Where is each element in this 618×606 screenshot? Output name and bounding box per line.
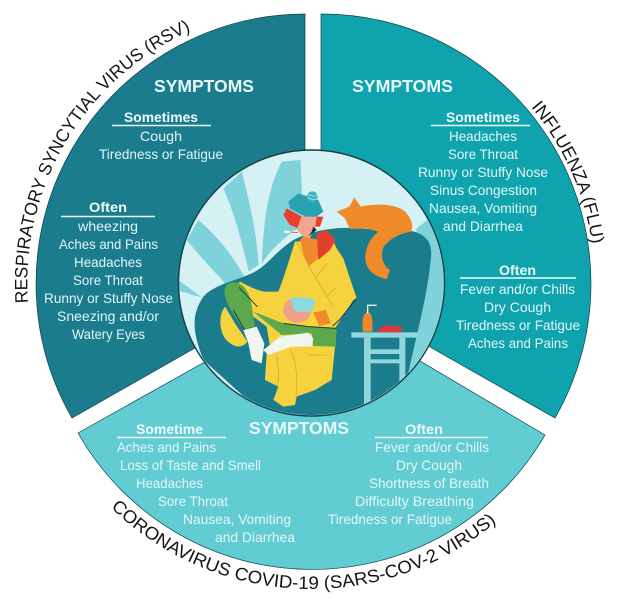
influenza sometimes list: Nausea, Vomiting xyxy=(429,200,537,216)
curved label: RSV: RESPIRATORY SYNCYTIAL VIRUS (RSV) xyxy=(14,20,190,302)
influenza often list: Often xyxy=(499,262,536,278)
icon: background rays xyxy=(178,160,447,373)
icon: green trousers xyxy=(224,282,337,347)
influenza often list: Tiredness or Fatigue xyxy=(456,317,580,333)
panel: COVID-19 xyxy=(78,361,545,569)
influenza often list: Dry Cough xyxy=(484,299,551,315)
RSV sometimes list: Cough xyxy=(140,128,182,144)
COVID often list: Shortness of Breath xyxy=(369,475,489,491)
COVID sometime list: and Diarrhea xyxy=(215,529,295,545)
icon: dark hair behind neck xyxy=(308,227,317,237)
icon: side table xyxy=(351,332,419,404)
RSV often list: Headaches xyxy=(74,254,142,270)
RSV often list: Sneezing and/or xyxy=(57,308,159,324)
central illustration: sick person on armchair xyxy=(178,150,447,420)
RSV often list: Often xyxy=(89,199,127,215)
COVID sometime list: Headaches xyxy=(136,475,203,491)
icon: face xyxy=(297,216,317,238)
RSV sometimes list xyxy=(99,109,223,162)
influenza often list: Fever and/or Chills xyxy=(460,281,575,297)
RSV often list: Sore Throat xyxy=(73,272,143,288)
panel: RSV xyxy=(36,14,305,418)
COVID sometime list xyxy=(117,421,295,545)
curved label: COVID-19: CORONAVIRUS COVID-19 (SARS-COV-2 VIRUS) xyxy=(114,501,496,592)
RSV often list: Runny or Stuffy Nose xyxy=(44,290,173,306)
icon: scarf xyxy=(300,237,320,267)
icon: robe folds xyxy=(233,263,357,397)
influenza sometimes list: Headaches xyxy=(449,128,517,144)
influenza sometimes list: Sore Throat xyxy=(448,146,518,162)
COVID often list: Tiredness or Fatigue xyxy=(328,511,452,527)
COVID sometime list: Aches and Pains xyxy=(117,439,216,455)
icon: cat xyxy=(337,197,412,279)
COVID sometime list: Sore Throat xyxy=(158,493,228,509)
influenza sometimes list: Runny or Stuffy Nose xyxy=(418,164,548,180)
panel: influenza xyxy=(321,14,591,418)
COVID often list xyxy=(328,421,489,527)
curved label: influenza: INFLUENZA (FLU) xyxy=(532,100,604,242)
influenza often list xyxy=(456,262,580,351)
RSV often list: wheezing xyxy=(77,218,138,234)
icon: robe lower-left blob xyxy=(220,307,247,346)
influenza sometimes list xyxy=(418,109,548,234)
COVID sometime list: Sometime xyxy=(136,421,203,437)
RSV sometimes list: Sometimes xyxy=(124,109,198,125)
influenza heading: SYMPTOMS xyxy=(352,76,453,96)
influenza sometimes list: Sometimes xyxy=(446,109,520,125)
influenza sometimes list: Sinus Congestion xyxy=(430,182,537,198)
RSV often list: Watery Eyes xyxy=(72,326,145,342)
influenza sometimes list: and Diarrhea xyxy=(443,218,523,234)
RSV often list xyxy=(44,199,173,342)
icon: bottle xyxy=(363,305,377,332)
RSV often list: Aches and Pains xyxy=(59,236,158,252)
icon: socks xyxy=(243,327,313,363)
COVID often list: Difficulty Breathing xyxy=(355,493,474,509)
COVID sometime list: Loss of Taste and Smell xyxy=(120,457,261,473)
icon: hair xyxy=(283,208,323,228)
icon: robe neck edge xyxy=(297,242,333,307)
COVID often list: Often xyxy=(405,421,443,437)
COVID sometime list: Nausea, Vomiting xyxy=(183,511,291,527)
COVID often list: Dry Cough xyxy=(396,457,462,473)
icon: red collar xyxy=(317,230,336,260)
icon: robe xyxy=(238,240,357,407)
icon: ice bag xyxy=(288,191,323,217)
icon: thermometer xyxy=(284,230,298,234)
icon: book xyxy=(378,325,402,332)
RSV heading: SYMPTOMS xyxy=(154,76,254,96)
icon: hands and mug xyxy=(283,297,331,326)
icon: armchair xyxy=(195,228,431,420)
COVID often list: Fever and/or Chills xyxy=(375,439,489,455)
COVID heading: SYMPTOMS xyxy=(249,418,349,438)
influenza often list: Aches and Pains xyxy=(468,335,568,351)
RSV sometimes list: Tiredness or Fatigue xyxy=(99,146,223,162)
